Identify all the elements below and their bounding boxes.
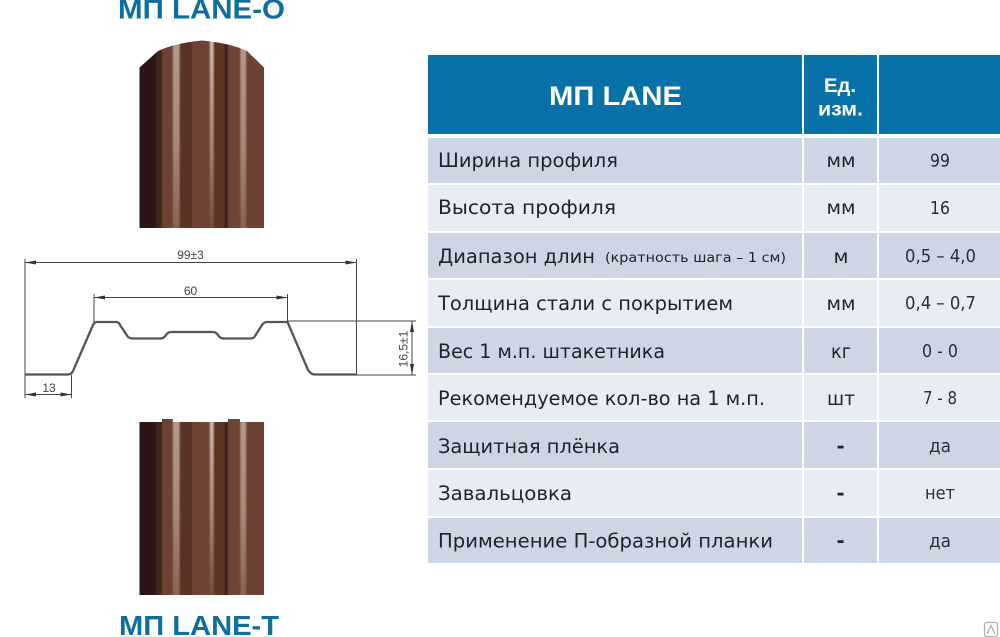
- row: Защитная плёнка: [428, 422, 1000, 468]
- row: Вес 1 м.п. штакетника: 0 - 0: [922, 342, 958, 362]
- row: Защитная плёнка: да: [929, 437, 951, 457]
- row: Диапазон длин: 0,5 – 4,0: [905, 247, 976, 267]
- row: Защитная плёнка: Защитная плёнка: [438, 435, 620, 458]
- table header: [428, 55, 1000, 134]
- specification table: [428, 55, 1000, 563]
- row: Диапазон длин: (кратность шага – 1 см): [605, 250, 786, 266]
- technical drawing: profile cross-section: [25, 248, 416, 398]
- row: Вес 1 м.п. штакетника: кг: [831, 340, 851, 363]
- row: Завальцовка: нет: [925, 484, 955, 504]
- row: Применение П-образной планки: Применение П-образной планки: [438, 530, 773, 552]
- dimension 99±3: 99±3: [177, 248, 204, 262]
- row: Диапазон длин: Диапазон длин: [438, 245, 595, 268]
- row: Толщина стали с покрытием: Толщина стали с покрытием: [437, 292, 733, 315]
- dimension 99±3: [25, 248, 356, 264]
- profile outline: [25, 322, 356, 374]
- row: Диапазон длин: м: [834, 245, 848, 268]
- table header: изм.: [818, 100, 863, 120]
- row: Ширина профиля: мм: [826, 149, 856, 172]
- row: Толщина стали с покрытием: мм: [826, 292, 856, 315]
- row: Высота профиля: мм: [826, 196, 856, 219]
- row: Завальцовка: [428, 470, 1000, 516]
- row: Ширина профиля: 99: [930, 152, 950, 172]
- dimension 16,5±1: [396, 321, 414, 375]
- dimension 13: 13: [42, 381, 56, 395]
- table header: МП LANE: [549, 81, 682, 111]
- row: Ширина профиля: [428, 138, 1000, 183]
- table header: Ед.: [824, 76, 856, 97]
- dimension 13: [25, 381, 72, 396]
- picket: flat top МП LANE-Т: [140, 419, 264, 595]
- picket: rounded top МП LANE-О: [140, 40, 264, 228]
- row: Рекомендуемое кол-во на 1 м.п.: [428, 375, 1000, 420]
- row: Рекомендуемое кол-во на 1 м.п.: шт: [827, 387, 855, 410]
- row: Толщина стали с покрытием: [428, 280, 1000, 326]
- row: Применение П-образной планки: -: [836, 530, 845, 552]
- row: Применение П-образной планки: [428, 518, 1000, 563]
- row: Высота профиля: Высота профиля: [438, 196, 616, 219]
- row: Высота профиля: 16: [930, 199, 950, 219]
- row: Завальцовка: -: [836, 482, 845, 505]
- row: Вес 1 м.п. штакетника: [428, 328, 1000, 373]
- dimension 16,5±1: 16,5±1: [396, 330, 410, 367]
- row: Рекомендуемое кол-во на 1 м.п.: Рекомендуемое кол-во на 1 м.п.: [438, 387, 765, 410]
- row: Ширина профиля: Ширина профиля: [438, 149, 618, 172]
- dimension 60: 60: [184, 284, 197, 298]
- row: Вес 1 м.п. штакетника: Вес 1 м.п. штакетника: [438, 340, 665, 363]
- dimension 60: [94, 284, 288, 300]
- row: Рекомендуемое кол-во на 1 м.п.: 7 - 8: [923, 389, 957, 409]
- row: Диапазон длин: [428, 233, 1000, 278]
- row: Высота профиля: [428, 185, 1000, 231]
- icon: watermark logo: [984, 622, 998, 636]
- row: Толщина стали с покрытием: 0,4 – 0,7: [905, 294, 976, 314]
- row: Применение П-образной планки: да: [929, 532, 951, 552]
- row: Защитная плёнка: -: [836, 435, 845, 458]
- row: Завальцовка: Завальцовка: [438, 482, 572, 505]
- extension lines: [25, 259, 416, 398]
